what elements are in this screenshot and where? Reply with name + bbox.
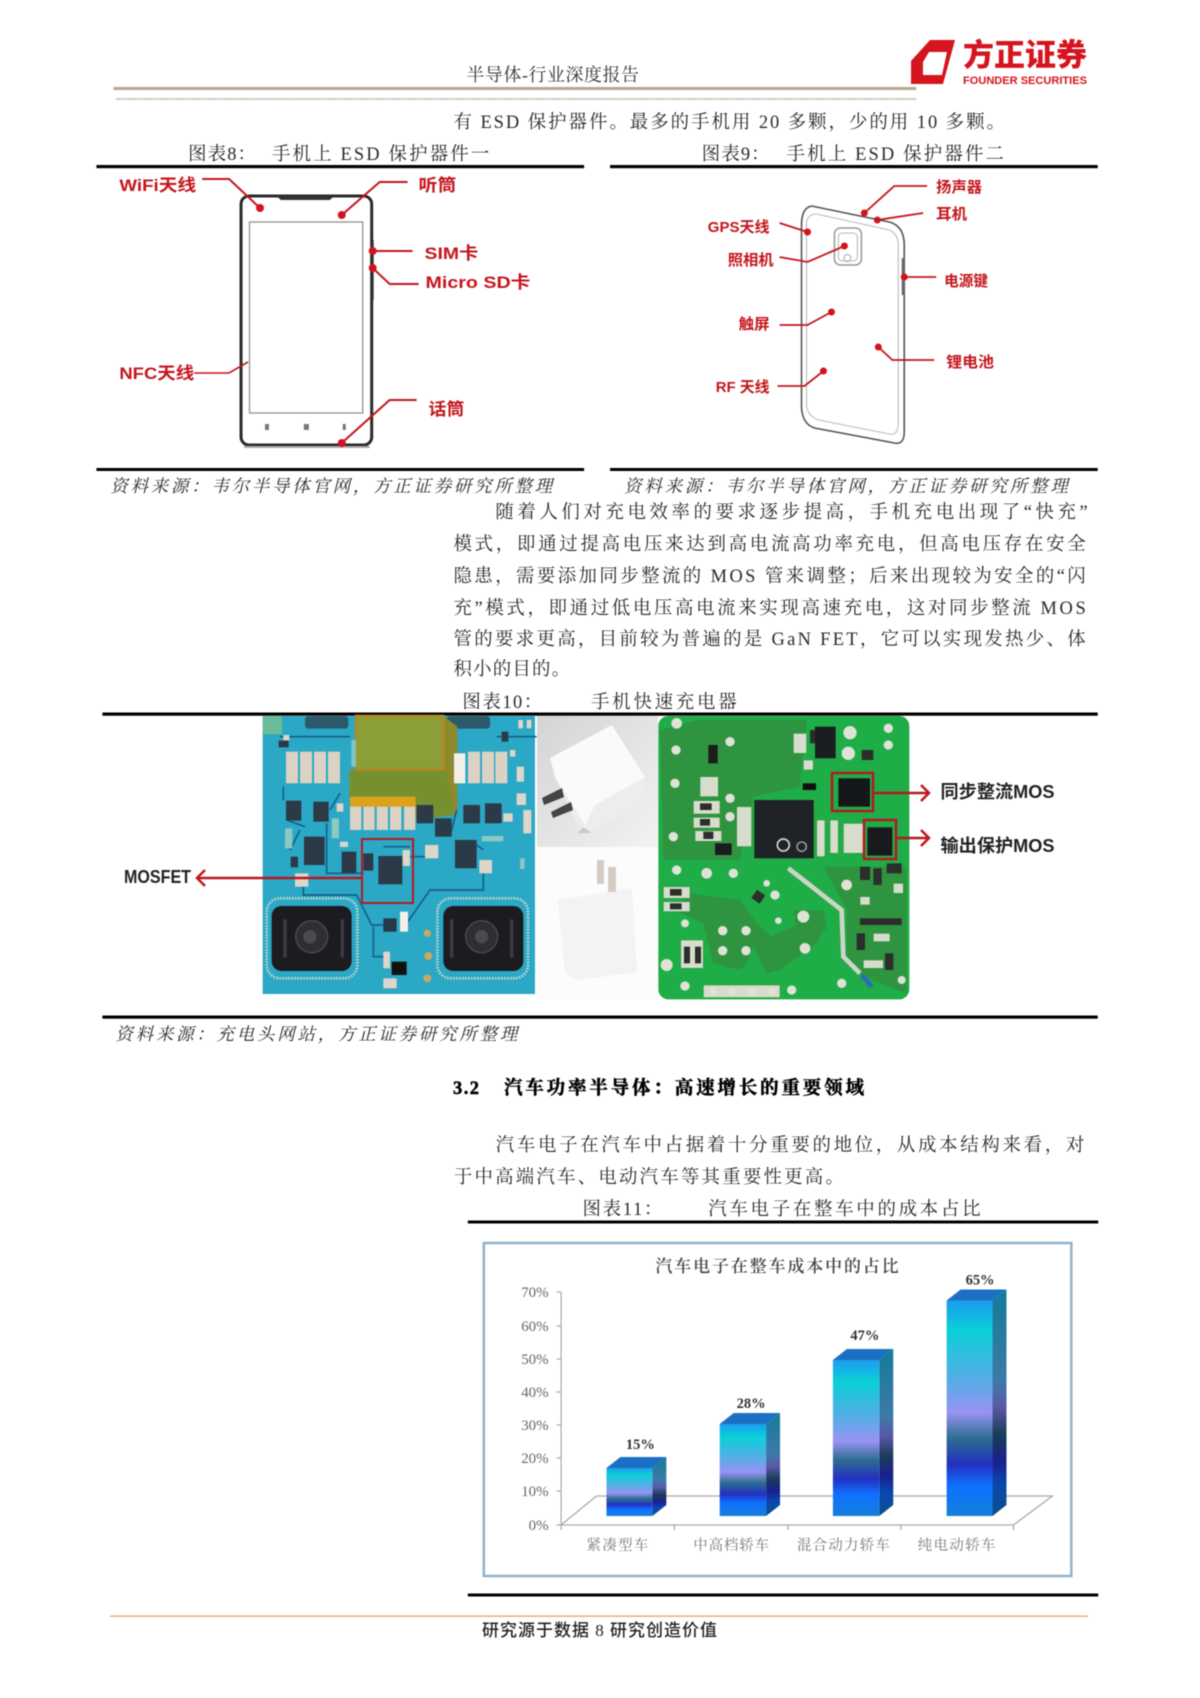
- phone front outline: [241, 196, 373, 447]
- y axis: 70%: [521, 1285, 549, 1301]
- photo: blue phone circuit board: [263, 716, 537, 994]
- bar: hybrid sedan 47%: 47%: [850, 1328, 879, 1344]
- section heading 3.2: 汽车功率半导体：高速增长的重要领域: [504, 1077, 864, 1099]
- callout labels: [119, 175, 530, 419]
- figure 9 caption: 图表9：: [702, 144, 770, 164]
- callout labels: Micro SD卡: [426, 273, 530, 292]
- callout: MOSFET: MOSFET: [124, 867, 191, 887]
- panel: phone back diagram: [708, 178, 994, 443]
- page header: [113, 64, 916, 99]
- body paragraph: fast charging: 隐患，需要添加同步整流的 MOS 管来调整；后来出现较为安全的“闪: [453, 566, 1086, 586]
- body paragraph: automotive electronics: 于中高端汽车、电动汽车等其重要性更高。: [454, 1167, 844, 1187]
- figure 10 caption: [462, 692, 737, 712]
- category labels: 纯电动轿车: [918, 1536, 996, 1554]
- header dotted rule: [116, 98, 916, 100]
- category labels: 混合动力轿车: [797, 1537, 890, 1554]
- body paragraph: fast charging: [453, 502, 1088, 679]
- category labels: 中高档轿车: [693, 1536, 769, 1554]
- callout labels: NFC天线: [119, 364, 194, 383]
- y axis: 20%: [521, 1451, 549, 1467]
- category labels: 紧凑型车: [587, 1536, 648, 1554]
- callout labels: [708, 178, 994, 396]
- body paragraph: fast charging: 随着人们对充电效率的要求逐步提高，手机充电出现了“快充”: [495, 502, 1088, 522]
- figure 11 caption: [583, 1199, 981, 1219]
- chart frame: [484, 1243, 1071, 1576]
- callout: output protection MOS: 输出保护MOS: [940, 835, 1054, 856]
- callout labels: SIM卡: [425, 244, 478, 263]
- bar: compact car 15%: 15%: [626, 1437, 655, 1453]
- page footer: 研究源于数据 8 研究创造价值: [482, 1620, 717, 1640]
- figure 9 caption: 手机上 ESD 保护器件二: [787, 144, 1004, 164]
- callout labels: 触屏: [739, 316, 770, 333]
- bar chart: automotive electronics cost share: [484, 1243, 1071, 1576]
- bar: electric sedan 65%: [947, 1272, 1006, 1516]
- y axis: 60%: [521, 1319, 549, 1335]
- bar: mid-high sedan 28%: [720, 1396, 780, 1516]
- body paragraph: fast charging: 充”模式，即通过低电压高电流来实现高速充电，这对同步整流 MOS: [453, 598, 1086, 618]
- body paragraph: automotive electronics: 汽车电子在汽车中占据着十分重要的地位，从成本结构来看，对: [496, 1135, 1084, 1155]
- y axis: 30%: [521, 1418, 549, 1434]
- logo: Founder Securities: FOUNDER SECURITIES: [963, 75, 1087, 87]
- body paragraph: automotive electronics: [454, 1135, 1084, 1187]
- bar: electric sedan 65%: 65%: [966, 1272, 994, 1289]
- section heading 3.2: 3.2: [453, 1079, 479, 1099]
- callout labels: WiFi天线: [119, 176, 196, 195]
- bar: compact car 15%: [606, 1437, 666, 1516]
- figure 8 caption: 图表8：: [188, 144, 256, 164]
- chart floor: [561, 1496, 1052, 1530]
- callout labels: 扬声器: [936, 178, 982, 196]
- figure 11 caption: 图表11：: [583, 1199, 662, 1219]
- phone back outline: [802, 206, 904, 443]
- panel: phone front diagram: [119, 175, 530, 447]
- callout labels: 听筒: [419, 175, 456, 195]
- logo: Founder Securities: [911, 30, 1087, 87]
- body paragraph: fast charging: 管的要求更高，目前较为普遍的是 GaN FET，它可以实现发热少、体: [453, 629, 1086, 649]
- header rule: [113, 87, 916, 90]
- y axis: 10%: [521, 1484, 549, 1500]
- source note figure 8: 资料来源：韦尔半导体官网，方正证券研究所整理: [110, 476, 555, 496]
- callout labels: GPS天线: [708, 218, 770, 236]
- callout: synchronous rectifier MOS: 同步整流MOS: [940, 782, 1054, 802]
- callout labels: 耳机: [936, 206, 967, 223]
- callout labels: 锂电池: [946, 353, 994, 371]
- figure 8 caption: 手机上 ESD 保护器件一: [272, 144, 489, 164]
- bar: hybrid sedan 47%: [833, 1328, 893, 1516]
- photo: white charger bottom: [537, 847, 658, 999]
- callout labels: RF 天线: [716, 378, 770, 396]
- figure 11 caption: 汽车电子在整车中的成本占比: [708, 1199, 981, 1219]
- figure 10 caption: 图表10：: [462, 692, 542, 712]
- callout labels: 话筒: [429, 399, 464, 419]
- callout: output protection MOS: [864, 820, 1054, 859]
- y axis: 0%: [529, 1518, 549, 1534]
- chart title: 汽车电子在整车成本中的占比: [655, 1256, 899, 1276]
- figure 10 caption: 手机快速充电器: [591, 692, 737, 712]
- bar: mid-high sedan 28%: 28%: [737, 1396, 766, 1412]
- header title: 半导体-行业深度报告: [466, 64, 639, 85]
- photo: white charger top: [537, 716, 658, 847]
- photo: green charger circuit board: [658, 716, 909, 999]
- intro text line: 有 ESD 保护器件。最多的手机用 20 多颗，少的用 10 多颗。: [453, 112, 1005, 132]
- callout labels: 照相机: [728, 252, 774, 269]
- source note figure 9: 资料来源：韦尔半导体官网，方正证券研究所整理: [624, 476, 1070, 496]
- y axis: [521, 1285, 561, 1534]
- y axis: 40%: [521, 1385, 549, 1401]
- callout labels: 电源键: [944, 272, 988, 290]
- callout: synchronous rectifier MOS: [832, 773, 1054, 811]
- category labels: [587, 1536, 996, 1554]
- leader lines: [778, 186, 936, 386]
- logo: Founder Securities: 方正证券: [963, 30, 1087, 75]
- callout: MOSFET: [124, 839, 413, 903]
- body paragraph: fast charging: 模式，即通过提高电压来达到高电流高功率充电，但高电压存在安全: [453, 534, 1086, 554]
- leader lines: [194, 179, 419, 443]
- y axis: 50%: [521, 1352, 549, 1368]
- body paragraph: fast charging: 积小的目的。: [453, 659, 570, 679]
- source note figure 10: 资料来源：充电头网站，方正证券研究所整理: [115, 1024, 520, 1044]
